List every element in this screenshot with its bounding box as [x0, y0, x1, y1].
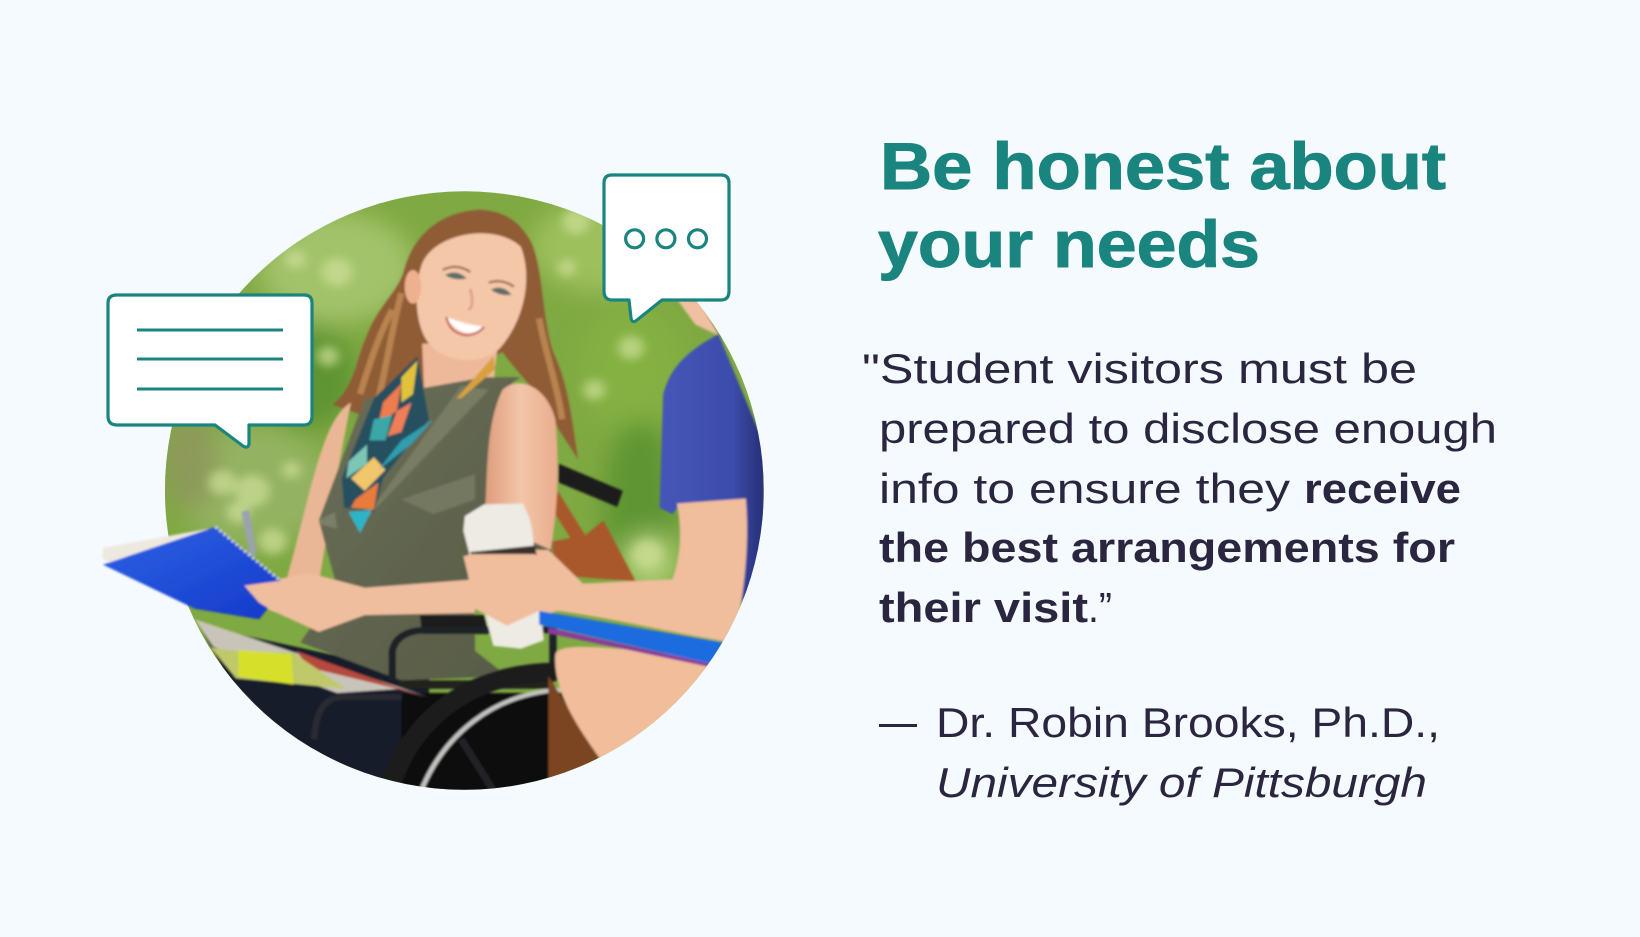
spiral notebook: [102, 510, 296, 619]
quote text: info to ensure they: [879, 465, 1290, 512]
face: [417, 233, 526, 360]
near arm: [484, 383, 558, 550]
speech bubble with lines: [108, 295, 312, 447]
attribution: [879, 699, 1440, 806]
heading: Be honest about: [880, 129, 1446, 203]
vest: [300, 377, 553, 680]
quote text: .”: [1088, 584, 1112, 631]
quote text: "Student visitors must be: [862, 345, 1417, 392]
coffee cup: [463, 504, 544, 649]
scarf: [342, 356, 496, 533]
wheelchair handle: [558, 464, 623, 507]
far arm: [287, 403, 351, 584]
friend's leg: [555, 647, 723, 760]
friend's neck: [677, 299, 718, 335]
quote text: [862, 345, 1497, 631]
attribution: Dr. Robin Brooks, Ph.D.,: [936, 699, 1440, 746]
quote text: receive: [1304, 465, 1461, 512]
blurred foliage: [164, 191, 764, 790]
eyes and smile: [445, 273, 467, 279]
friend's folder: [539, 611, 723, 664]
hair: [333, 210, 578, 459]
friend's arm and hand: [463, 499, 747, 642]
quote text: their visit: [879, 584, 1088, 631]
brown bag strap behind the leg: [546, 676, 600, 778]
quote text: the best arrangements for: [879, 524, 1455, 571]
attribution: University of Pittsburgh: [936, 759, 1427, 806]
bag: [553, 520, 636, 581]
friend's blue shirt: [660, 334, 764, 605]
speech bubble with dots: [604, 175, 729, 322]
wheel: [388, 672, 558, 794]
heading: your needs: [878, 207, 1260, 281]
wheelchair frame: [420, 615, 489, 634]
heading: [878, 129, 1446, 281]
neck: [420, 342, 498, 390]
photo: student in wheelchair talking with a friend: [102, 175, 792, 798]
binder and papers on lap: [195, 619, 429, 697]
forearm and hand on notebook: [245, 573, 475, 632]
quote text: prepared to disclose enough: [879, 405, 1497, 452]
pants and dark lap area: [199, 626, 429, 794]
